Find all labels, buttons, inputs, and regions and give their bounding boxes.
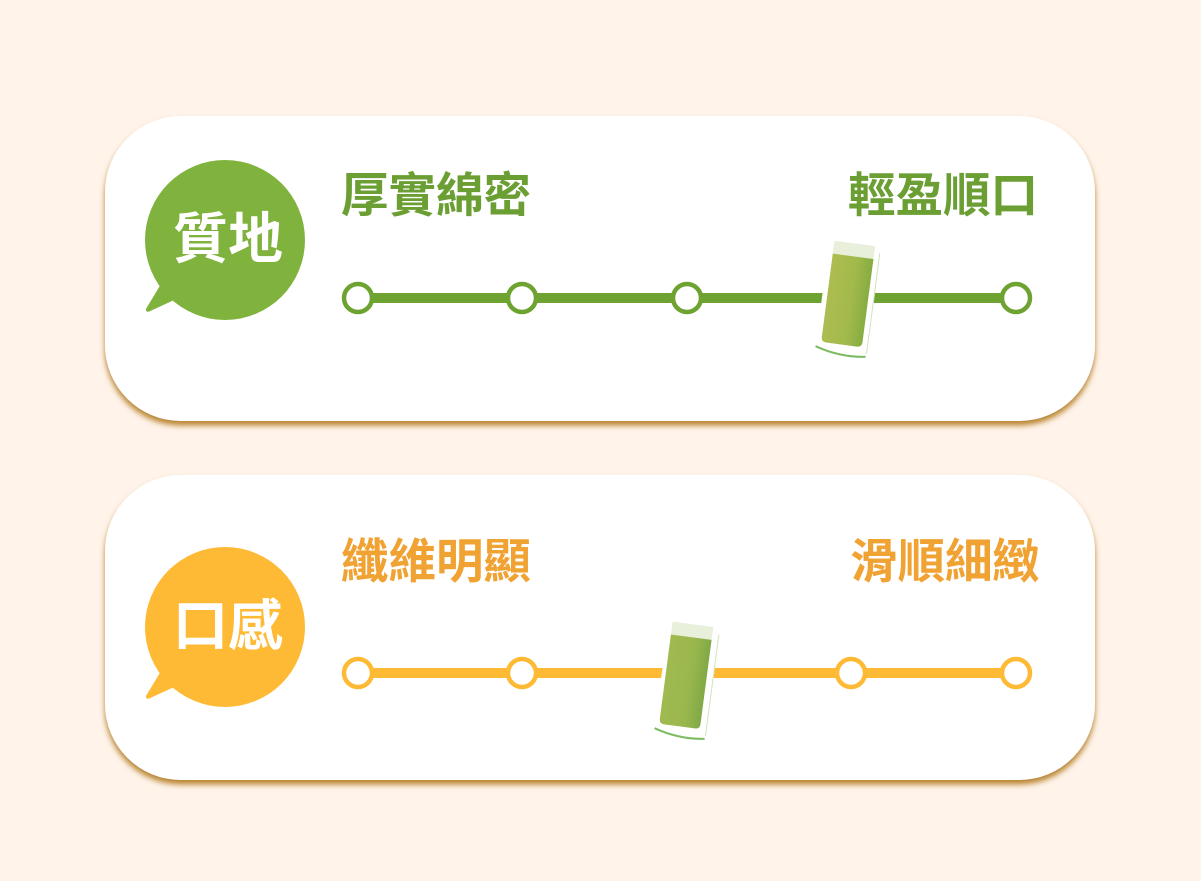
speech bubble: mouthfeel (145, 547, 305, 707)
panel: mouthfeel (105, 475, 1095, 780)
label: obvious fiber: 纖維明顯 (341, 536, 531, 589)
label: smooth and fine: 滑順細緻 (850, 536, 1040, 589)
scale: texture (344, 284, 1030, 312)
icon: green smoothie glass marker (815, 237, 881, 358)
speech bubble: texture: 質地 (173, 208, 283, 270)
label: light and smooth: 輕盈順口 (848, 170, 1038, 223)
label: thick and dense: 厚實綿密 (341, 170, 531, 223)
card background (105, 116, 1095, 421)
panel: texture (105, 116, 1095, 421)
speech bubble: mouthfeel: 口感 (173, 595, 283, 657)
card background (105, 475, 1095, 780)
scale: mouthfeel (344, 659, 1030, 687)
icon: green smoothie glass marker (654, 618, 721, 740)
speech bubble: texture (145, 160, 305, 320)
